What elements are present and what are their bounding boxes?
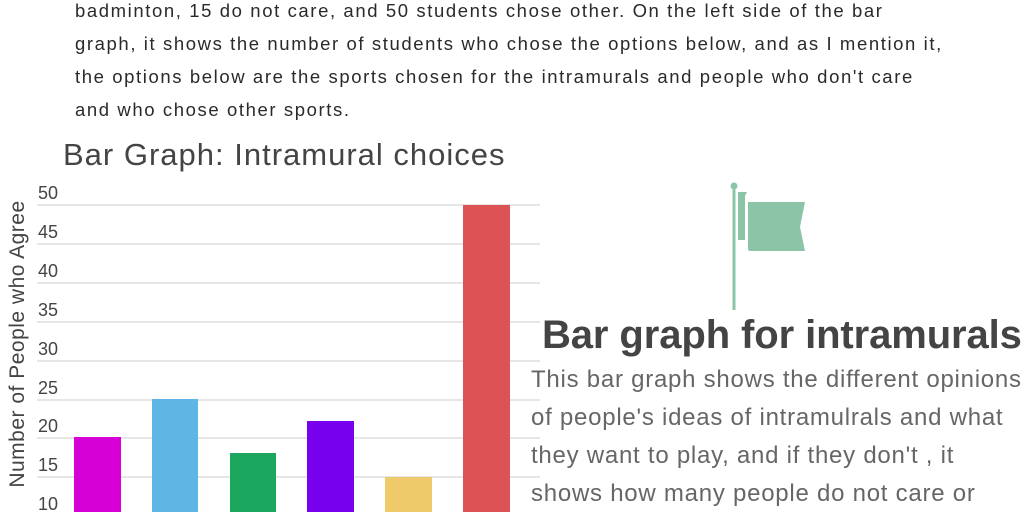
description text: shows how many people do not care or — [531, 480, 976, 507]
description text: This bar graph shows the different opinions — [531, 366, 1022, 393]
bar chart: 40 — [38, 261, 58, 281]
description text: they want to play, and if they don't , it — [531, 442, 954, 469]
chart title: Bar Graph: Intramural choices — [63, 137, 506, 172]
icon: flag — [730, 182, 805, 310]
bar chart: 30 — [38, 339, 58, 359]
bar chart: 20 — [38, 416, 58, 436]
description text: of people's ideas of intramulrals and what — [531, 404, 1003, 431]
bar chart: 50 — [38, 183, 58, 203]
bar chart: 25 — [38, 378, 58, 398]
bar chart: 35 — [38, 300, 58, 320]
intro paragraph — [75, 0, 943, 120]
intro paragraph: the options below are the sports chosen for the intramurals and people who don't care — [75, 66, 914, 87]
bars — [74, 205, 510, 513]
y axis label: Number of People who Agree — [6, 200, 29, 488]
description text — [531, 366, 1022, 507]
heading: Bar graph for intramurals — [542, 313, 1022, 357]
bar chart: 15 — [38, 455, 58, 475]
intro paragraph: graph, it shows the number of students who chose the options below, and as I mention it, — [75, 33, 943, 54]
bar chart: 45 — [38, 222, 58, 242]
intro paragraph: and who chose other sports. — [75, 99, 351, 120]
intro paragraph: badminton, 15 do not care, and 50 students chose other. On the left side of the bar — [75, 0, 884, 21]
